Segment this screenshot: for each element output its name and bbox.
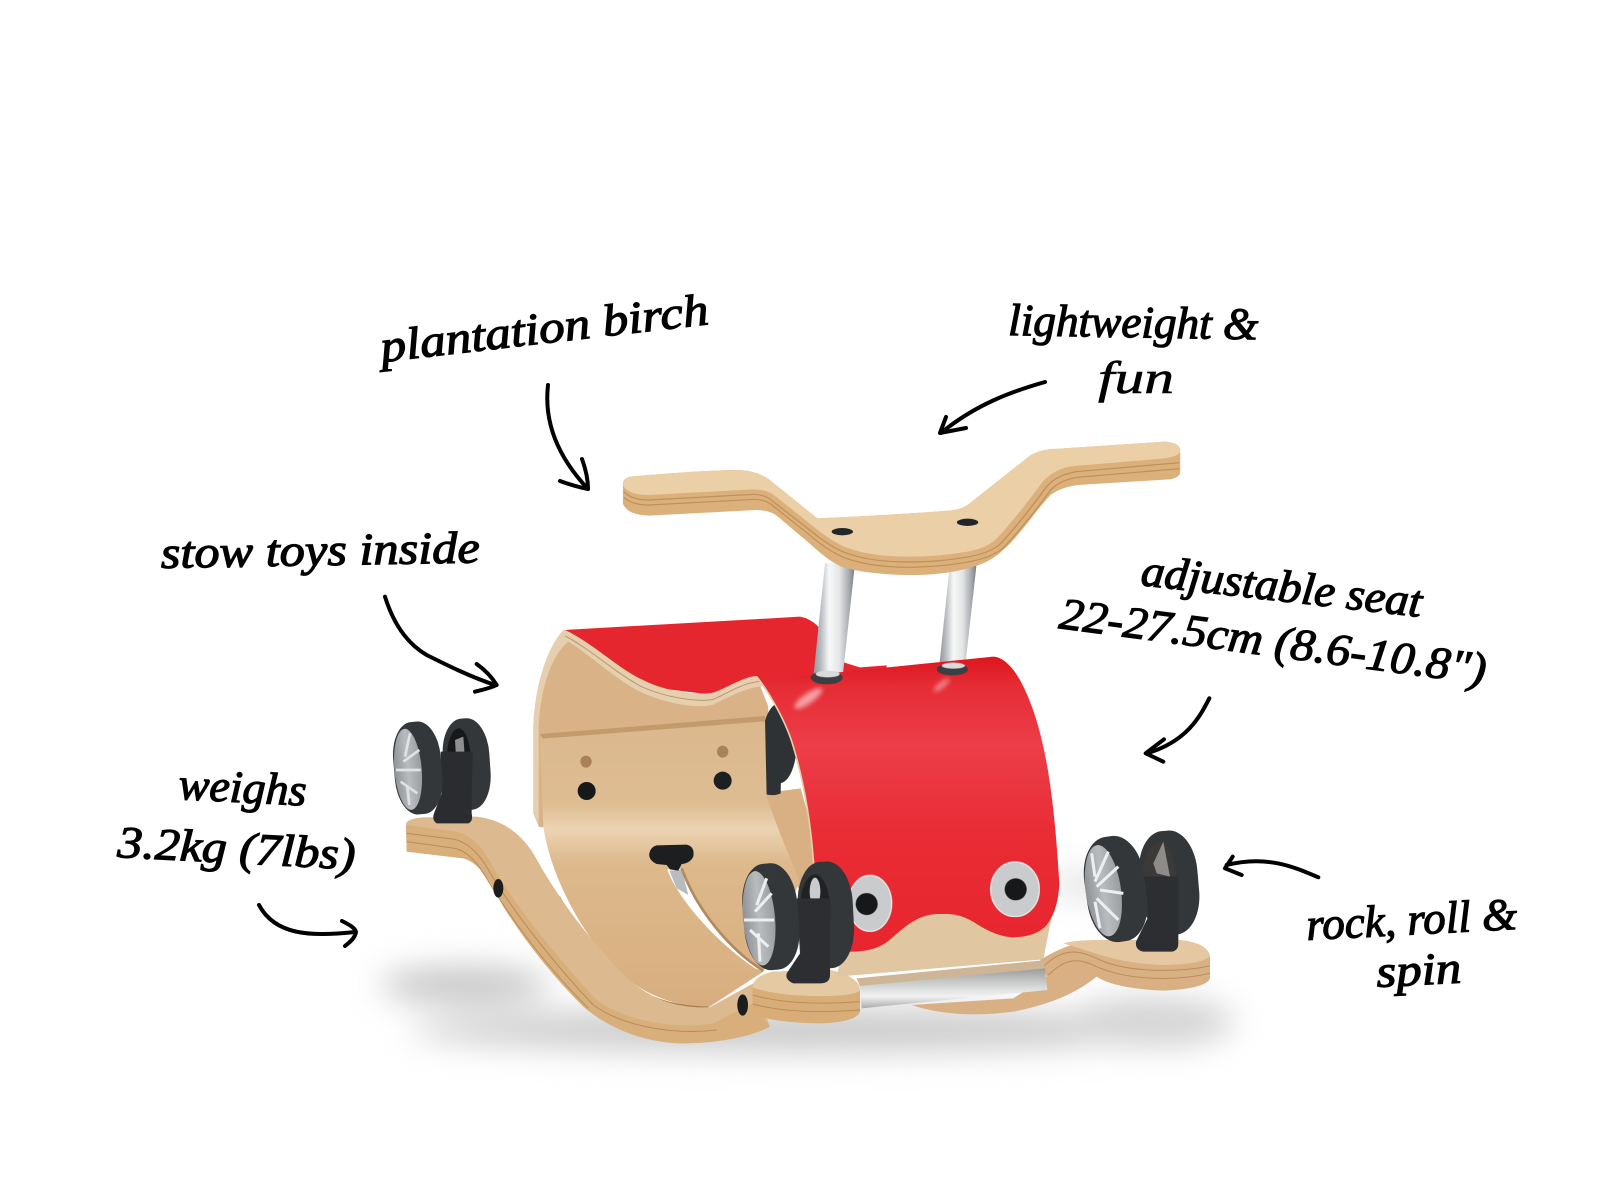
toy: rocking ride-on — [390, 442, 1210, 1043]
label: weight: 3.2kg (7lbs) — [115, 817, 357, 879]
label: rock, roll and spin — [1305, 889, 1518, 997]
front wheel assembly — [739, 860, 856, 983]
label: adjustable seat: 22-27.5cm (8.6-10.8") — [1057, 588, 1490, 694]
toy body, left half — [390, 617, 887, 1043]
right rail — [912, 940, 1210, 1014]
label: lightweight and fun: fun — [1098, 353, 1174, 403]
seat laminate lines — [624, 463, 1179, 567]
label: lightweight and fun: lightweight & — [1008, 295, 1259, 349]
label: lightweight and fun — [1008, 295, 1259, 403]
storage plate and curved board — [540, 719, 799, 1007]
back tyre — [440, 717, 493, 812]
front tyre — [390, 720, 446, 816]
hub — [1079, 843, 1127, 939]
label: rock, roll and spin: rock, roll & — [1305, 889, 1518, 950]
seat top surface — [623, 442, 1180, 557]
handle grip — [649, 845, 694, 871]
seat — [623, 442, 1180, 575]
label: weight: weighs — [177, 759, 308, 816]
shell inner edge — [757, 677, 815, 877]
screw holes — [580, 756, 592, 768]
arrow: stow toys — [385, 597, 497, 692]
chrome poles — [813, 563, 977, 677]
screws — [578, 782, 596, 800]
front pad — [753, 970, 860, 1023]
toy body, right half — [739, 563, 1210, 1014]
arrow: weight — [259, 905, 356, 946]
handle slot — [667, 868, 763, 971]
board edge — [559, 897, 708, 1007]
plate ledge — [540, 716, 765, 739]
rear wheel seen through arch — [762, 703, 797, 795]
right pad top — [1063, 940, 1209, 965]
axle and post — [433, 752, 473, 823]
rocker bolts — [493, 879, 503, 898]
label: adjustable seat: adjustable seat — [1139, 545, 1426, 627]
wood under body — [837, 907, 1052, 977]
rocker laminate side — [406, 825, 770, 1043]
hub — [739, 870, 779, 967]
washer left — [848, 875, 892, 931]
seat screws — [832, 528, 853, 535]
tan rail piece — [857, 961, 1047, 987]
inner right wall — [763, 788, 820, 888]
label: plantation birch: plantation birch — [374, 284, 711, 372]
back tyre — [796, 860, 856, 970]
pole collars — [811, 671, 843, 684]
arrow: rock roll spin — [1225, 857, 1318, 877]
arrow: lightweight — [940, 382, 1045, 433]
inner back wall — [533, 630, 768, 827]
washer right — [991, 862, 1039, 917]
right wheel assembly — [1079, 828, 1203, 952]
label: stow toys inside: stow toys inside — [160, 522, 480, 578]
label: adjustable seat — [1057, 545, 1490, 694]
axle and post — [786, 898, 830, 983]
plywood edge of arch — [533, 629, 763, 823]
red body shell — [757, 657, 1059, 952]
arrow: plantation birch — [547, 385, 588, 489]
front tyre — [739, 861, 803, 972]
red top, back of arch — [564, 617, 887, 695]
label: rock, roll and spin: spin — [1375, 943, 1462, 997]
ground shadow — [380, 871, 1235, 1052]
shell highlights — [792, 676, 951, 712]
seat post tube — [860, 968, 1047, 1008]
arrow: adjustable seat — [1146, 698, 1209, 762]
label: weight — [115, 759, 357, 879]
hub — [391, 728, 425, 811]
left wheel assembly — [390, 717, 493, 823]
axle and post — [1136, 877, 1178, 952]
front tyre — [1079, 832, 1153, 946]
back tyre — [1136, 828, 1203, 937]
seat laminate side — [623, 442, 1180, 575]
left rocker — [406, 817, 770, 1043]
